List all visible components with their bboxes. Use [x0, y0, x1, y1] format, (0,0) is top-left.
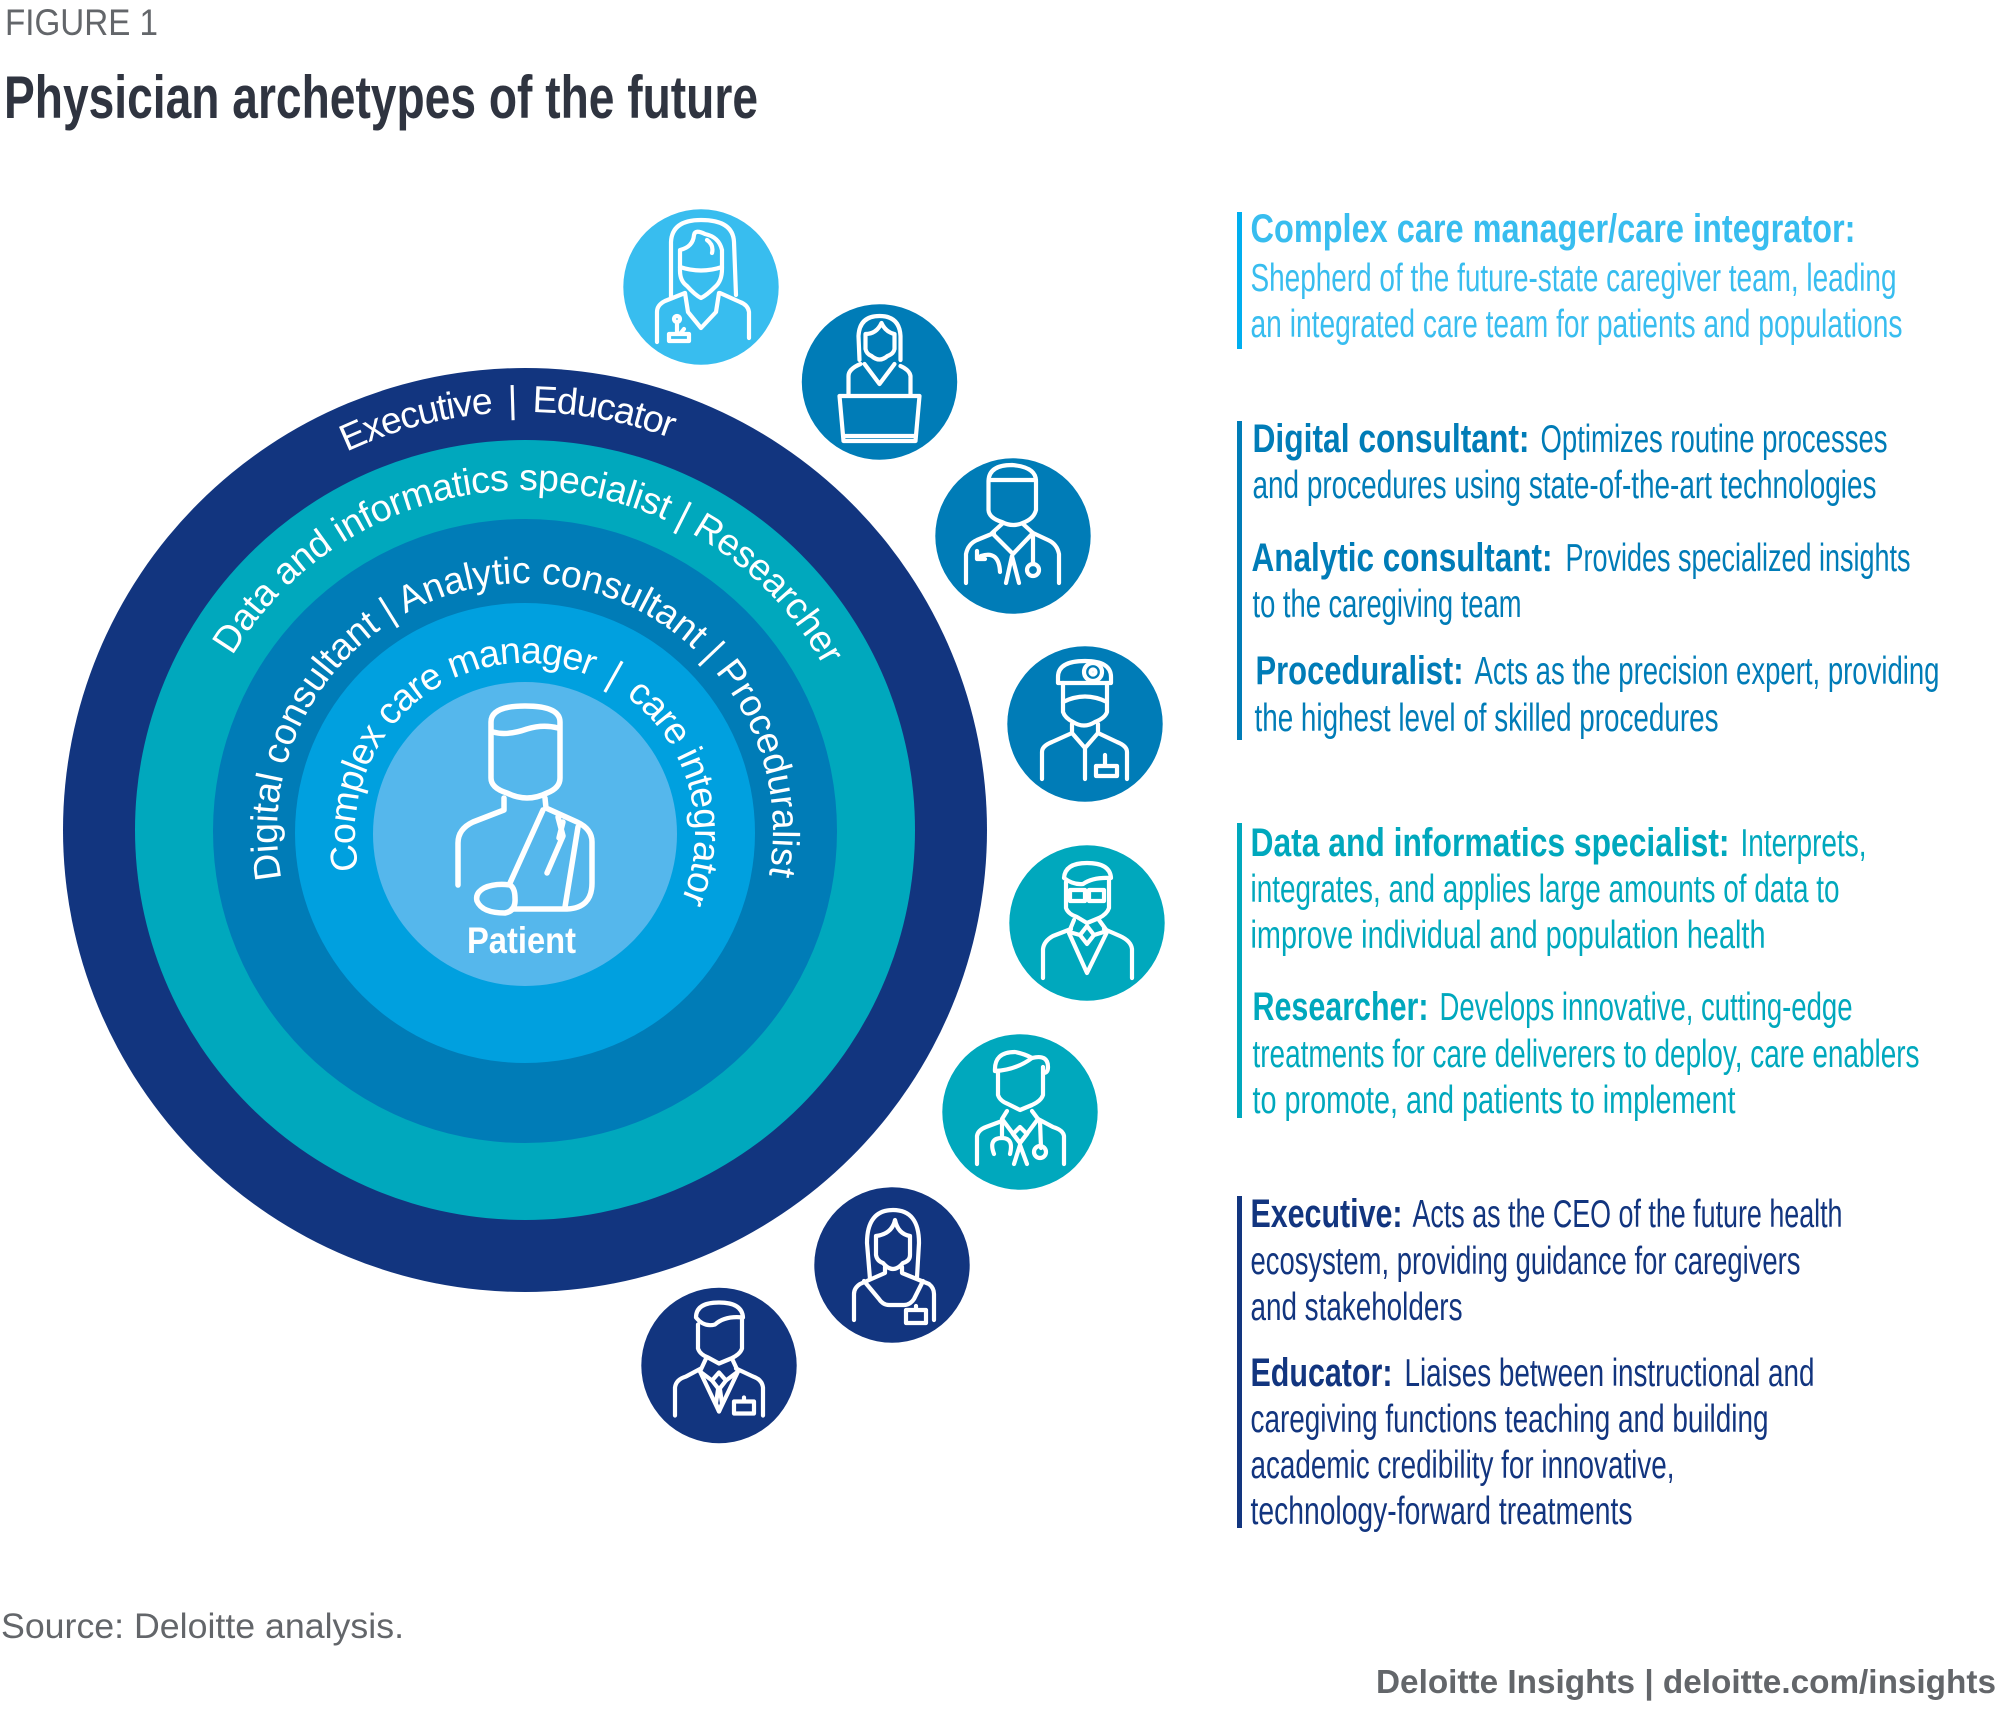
- icon: educator: [641, 1288, 797, 1443]
- description: [1250, 257, 1902, 346]
- ring: executive and educator: [63, 368, 987, 1292]
- data and informatics specialist: [1250, 821, 1866, 957]
- ring: complex care: [295, 603, 755, 1063]
- researcher: Researcher:: [1252, 985, 1428, 1029]
- educator: [1250, 1351, 1814, 1533]
- source note: Source: Deloitte analysis.: [1, 1607, 404, 1646]
- analytic consultant: to the caregiving team: [1252, 583, 1522, 626]
- ring label: data and research: Data and informatics specialist | Researcher: [212, 468, 840, 660]
- icon: data and informatics specialist: [1009, 845, 1165, 1001]
- text block: complex care manager: [1237, 207, 1902, 349]
- icon: analytic consultant: [935, 458, 1091, 614]
- digital consultant: Digital consultant:: [1252, 417, 1530, 461]
- proceduralist: [1254, 649, 1940, 740]
- accent bar: [1237, 212, 1242, 349]
- centre: patient: [373, 682, 677, 986]
- concentric circle diagram: [63, 368, 987, 1292]
- ring label: consultants and proceduralist: Digital consultant | Analytic consultant | Proceduralist: [250, 556, 800, 880]
- icon: proceduralist: [1007, 646, 1163, 802]
- analytic consultant: Analytic consultant:: [1252, 536, 1552, 580]
- researcher: to promote, and patients to implement: [1252, 1079, 1736, 1122]
- text block: data and research: [1237, 821, 1920, 1122]
- icon: digital consultant: [802, 304, 957, 460]
- icon: executive: [814, 1187, 970, 1343]
- proceduralist: Proceduralist:: [1256, 649, 1464, 693]
- text block: executive and educator: [1237, 1192, 1842, 1533]
- educator: technology-forward treatments: [1250, 1490, 1632, 1533]
- title: Physician archetypes of the future: [4, 64, 758, 131]
- heading: Complex care manager/care integrator:: [1250, 207, 1856, 251]
- proceduralist: the highest level of skilled procedures: [1254, 697, 1718, 740]
- analytic consultant: [1252, 536, 1910, 626]
- educator: Educator:: [1250, 1351, 1392, 1395]
- credit line: Deloitte Insights | deloitte.com/insights: [1376, 1663, 1996, 1700]
- educator: Liaises between instructional and: [1404, 1352, 1814, 1395]
- ring: data and research: [135, 440, 915, 1220]
- icon: researcher: [942, 1034, 1098, 1190]
- executive: Executive:: [1250, 1192, 1402, 1236]
- data and informatics specialist: Interprets,: [1740, 822, 1866, 865]
- accent bar: [1237, 823, 1242, 1118]
- executive: and stakeholders: [1250, 1286, 1462, 1329]
- patient label: Patient: [467, 920, 576, 961]
- educator: academic credibility for innovative,: [1250, 1444, 1674, 1487]
- text block: consultants and proceduralist: [1237, 417, 1940, 740]
- accent bar: [1237, 421, 1242, 740]
- icon: patient with arm sling: [458, 706, 592, 913]
- executive: [1250, 1192, 1842, 1329]
- data and informatics specialist: Data and informatics specialist:: [1250, 821, 1730, 865]
- data and informatics specialist: improve individual and population health: [1250, 914, 1766, 957]
- ring: consultants and proceduralist: [213, 519, 837, 1143]
- digital consultant: [1252, 417, 1888, 507]
- educator: caregiving functions teaching and building: [1250, 1398, 1768, 1441]
- ring label: complex care: Complex care manager | care integrator: [330, 643, 716, 908]
- figure label: FIGURE 1: [5, 2, 158, 43]
- accent bar: [1237, 1196, 1242, 1528]
- ring label: executive and educator: Executive | Educator: [339, 385, 677, 450]
- researcher: [1252, 985, 1920, 1122]
- icon: complex care manager: [623, 209, 779, 365]
